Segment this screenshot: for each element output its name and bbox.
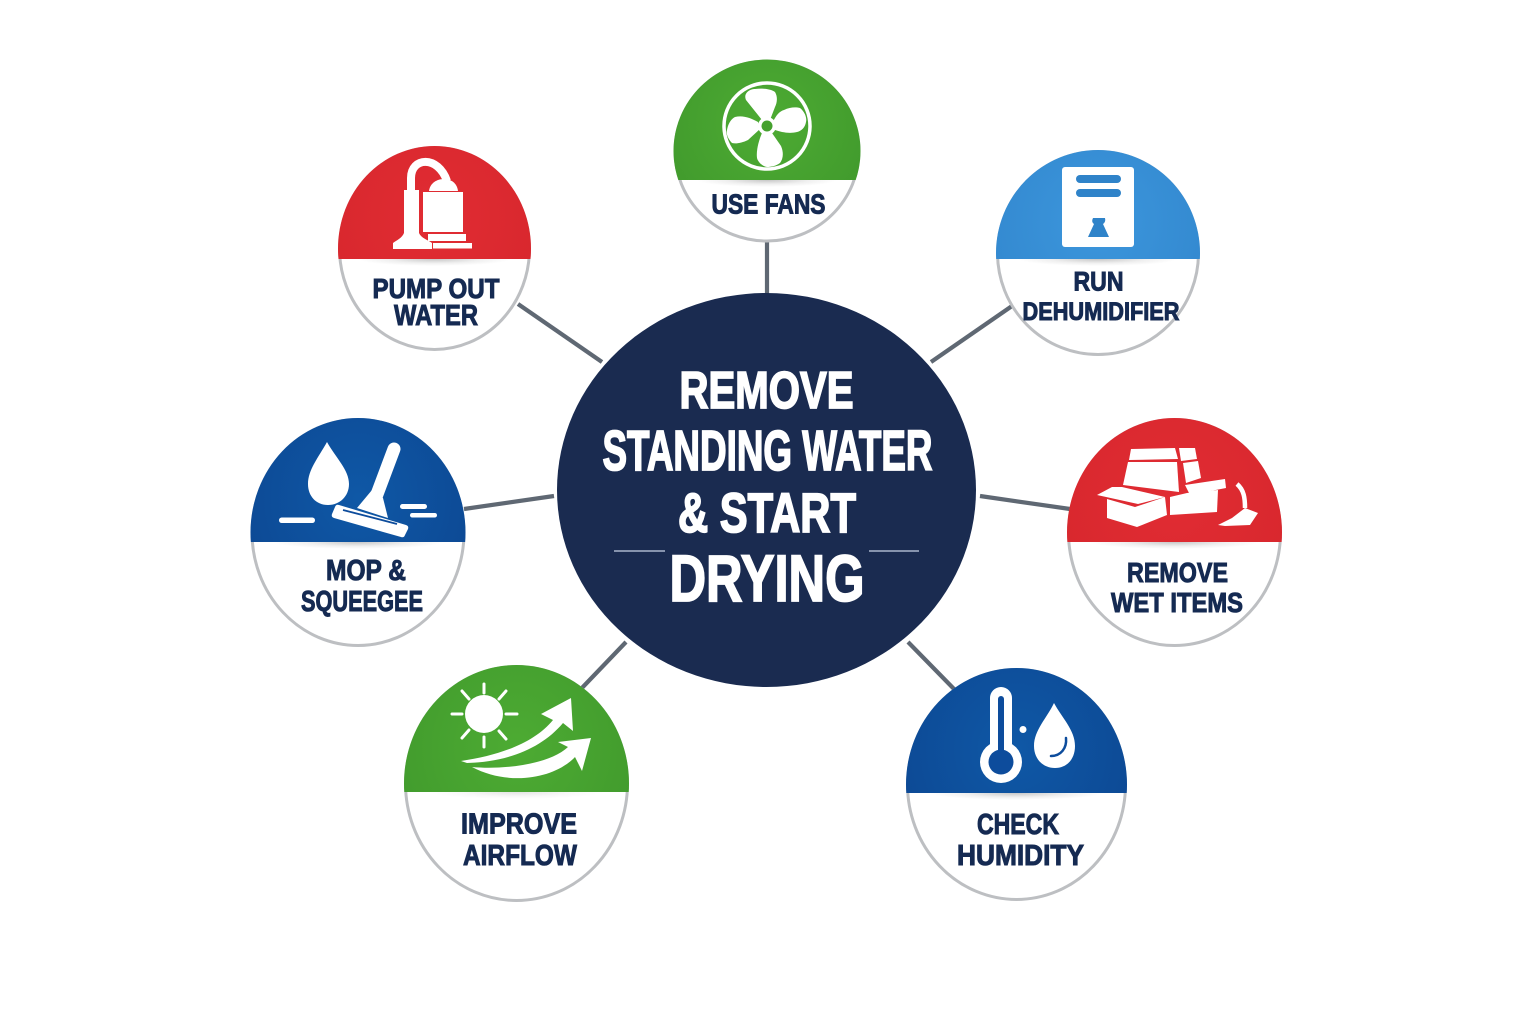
icon: boxes — [1097, 448, 1258, 527]
icon: sun and arrows — [452, 684, 591, 778]
central title: & START — [678, 481, 856, 544]
central title: DRYING — [670, 541, 864, 615]
icon: thermometer and drop — [980, 687, 1075, 783]
label: mop and squeegee: MOP & — [326, 555, 406, 587]
node: mop and squeegee — [250, 418, 466, 647]
label: check humidity: HUMIDITY — [957, 840, 1084, 872]
label: mop and squeegee: SQUEEGEE — [301, 586, 423, 618]
label: pump out water — [372, 273, 500, 332]
node: pump out water — [338, 146, 531, 351]
label: mop and squeegee — [301, 555, 423, 618]
label: improve airflow: IMPROVE — [461, 808, 577, 840]
label: check humidity: CHECK — [977, 809, 1059, 841]
central title: STANDING WATER — [602, 419, 932, 483]
label: remove wet items: REMOVE — [1127, 557, 1228, 588]
label: remove wet items — [1111, 557, 1243, 618]
icon: water pump vacuum — [393, 162, 472, 249]
central title — [602, 362, 932, 615]
node: use fans — [674, 60, 860, 242]
icon: dehumidifier — [1062, 167, 1134, 247]
label: run dehumidifier: RUN — [1074, 266, 1124, 296]
icon: fan — [724, 83, 810, 169]
label: pump out water: WATER — [394, 300, 478, 332]
node: improve airflow — [404, 665, 629, 902]
label: pump out water: PUMP OUT — [372, 273, 500, 304]
label: improve airflow: AIRFLOW — [463, 840, 578, 872]
central circle — [557, 293, 976, 687]
label: improve airflow — [461, 808, 578, 872]
icon: drop and squeegee — [279, 442, 437, 537]
label: run dehumidifier — [1022, 266, 1180, 326]
central title: REMOVE — [680, 362, 854, 420]
label: run dehumidifier: DEHUMIDIFIER — [1022, 298, 1180, 326]
node: check humidity — [906, 668, 1127, 901]
label: use fans: USE FANS — [712, 188, 826, 220]
node: remove wet items — [1067, 418, 1282, 647]
label: remove wet items: WET ITEMS — [1111, 587, 1243, 618]
connector lines — [464, 240, 1070, 690]
node: run dehumidifier — [996, 150, 1200, 356]
label: check humidity — [957, 809, 1084, 872]
